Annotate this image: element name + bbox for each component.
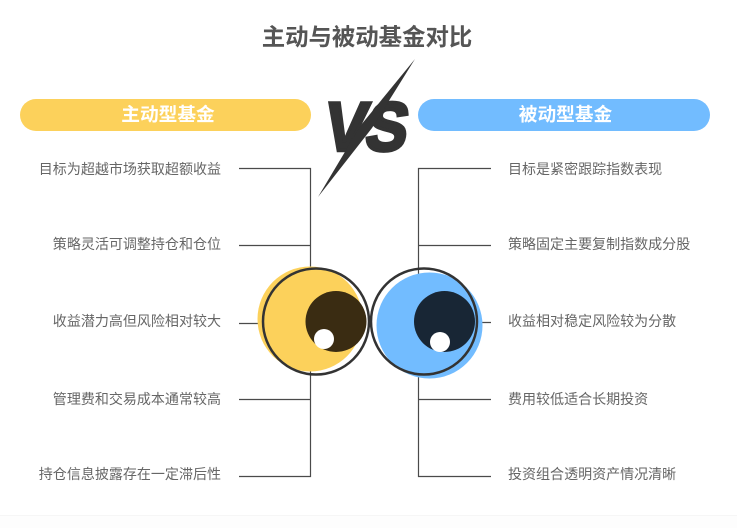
text: passive funds item 3: 收益相对稳定风险较为分散	[508, 313, 676, 329]
text: active funds item 1: 目标为超越市场获取超额收益	[39, 161, 221, 177]
text: active funds item 3: 收益潜力高但风险相对较大	[53, 313, 221, 329]
panel header: active funds: 主动型基金	[121, 104, 215, 125]
icon: yellow eye	[258, 266, 369, 374]
icon: VS emblem	[318, 59, 415, 197]
text: active funds item 5: 持仓信息披露存在一定滞后性	[39, 466, 221, 482]
connector lines: active funds	[239, 168, 310, 476]
text: active funds item 2: 策略灵活可调整持仓和仓位	[53, 236, 221, 252]
text: passive funds item 5: 投资组合透明资产情况清晰	[508, 466, 676, 482]
footer band	[0, 515, 737, 528]
panel header: passive funds	[418, 99, 710, 131]
icon: VS emblem: VS	[320, 89, 415, 166]
panel header: passive funds: 被动型基金	[519, 104, 612, 125]
text: active funds item 4: 管理费和交易成本通常较高	[53, 391, 221, 407]
panel header: active funds	[20, 99, 311, 131]
text: passive funds item 1: 目标是紧密跟踪指数表现	[508, 161, 662, 177]
title: 主动与被动基金对比	[262, 24, 472, 50]
connector lines: passive funds	[418, 168, 491, 476]
text: passive funds item 2: 策略固定主要复制指数成分股	[508, 236, 690, 252]
text: passive funds item 4: 费用较低适合长期投资	[508, 391, 648, 407]
icon: blue eye	[371, 268, 482, 378]
